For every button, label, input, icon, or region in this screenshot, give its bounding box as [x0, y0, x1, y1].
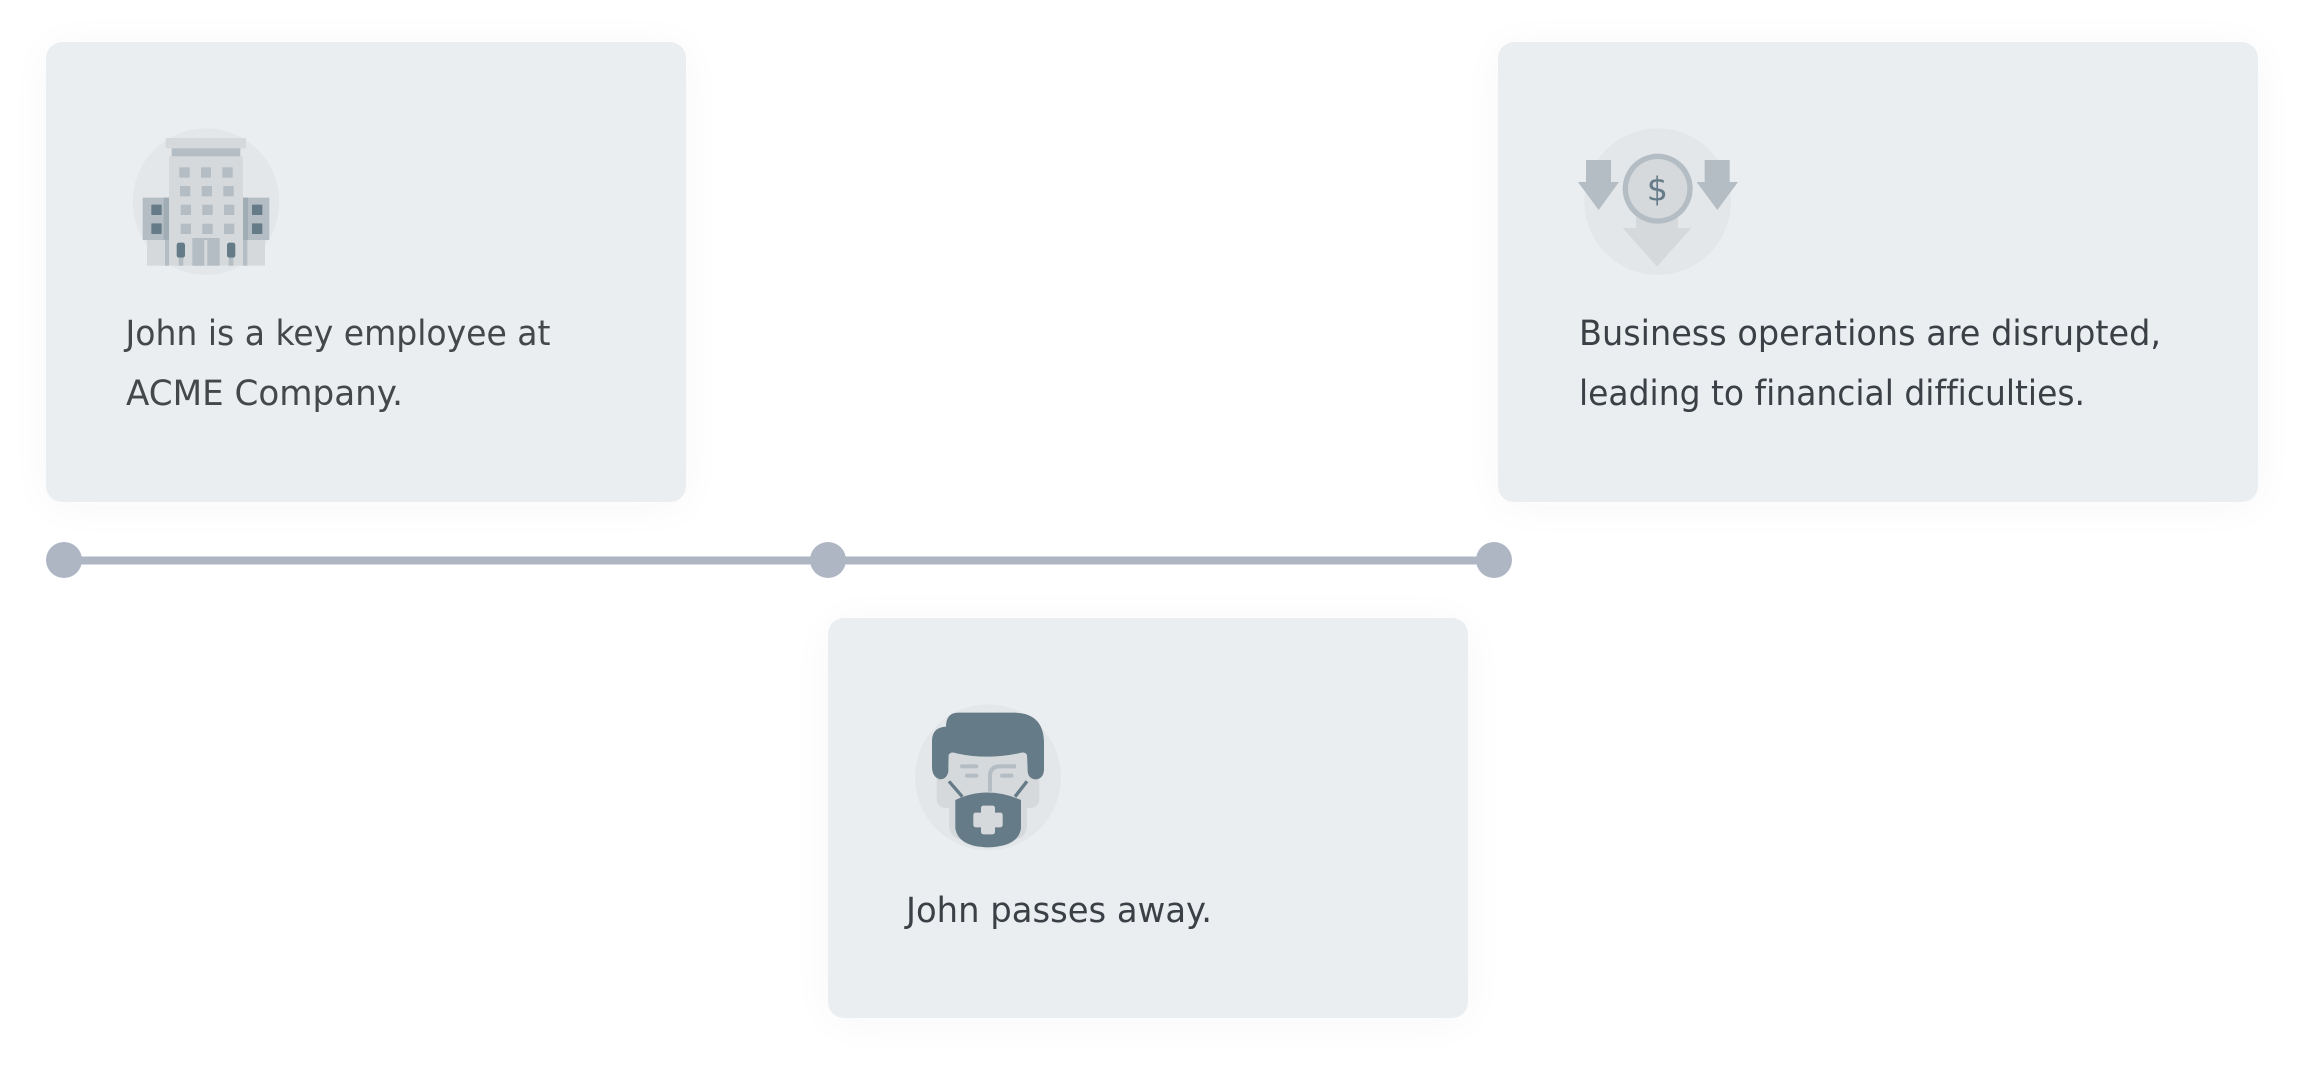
- text: business disruption: leading to financial difficulties.: [1579, 374, 2085, 414]
- icon: man with medical mask: [915, 704, 1061, 850]
- panel: John passes away: [828, 618, 1468, 1018]
- text: John is a key employee: John is a key employee at: [124, 314, 551, 354]
- text: John is a key employee: [124, 314, 551, 414]
- text: John is a key employee: ACME Company.: [126, 374, 403, 414]
- icon: falling money: [1578, 128, 1738, 275]
- icon: office building: [133, 128, 279, 275]
- panel: business disruption: [1498, 42, 2258, 502]
- icon: falling money: $: [1647, 170, 1668, 209]
- text: John passes away: John passes away.: [904, 891, 1212, 931]
- panel: John is a key employee: [46, 42, 686, 502]
- text: business disruption: [1579, 314, 2161, 414]
- text: business disruption: Business operations are disrupted,: [1579, 314, 2161, 354]
